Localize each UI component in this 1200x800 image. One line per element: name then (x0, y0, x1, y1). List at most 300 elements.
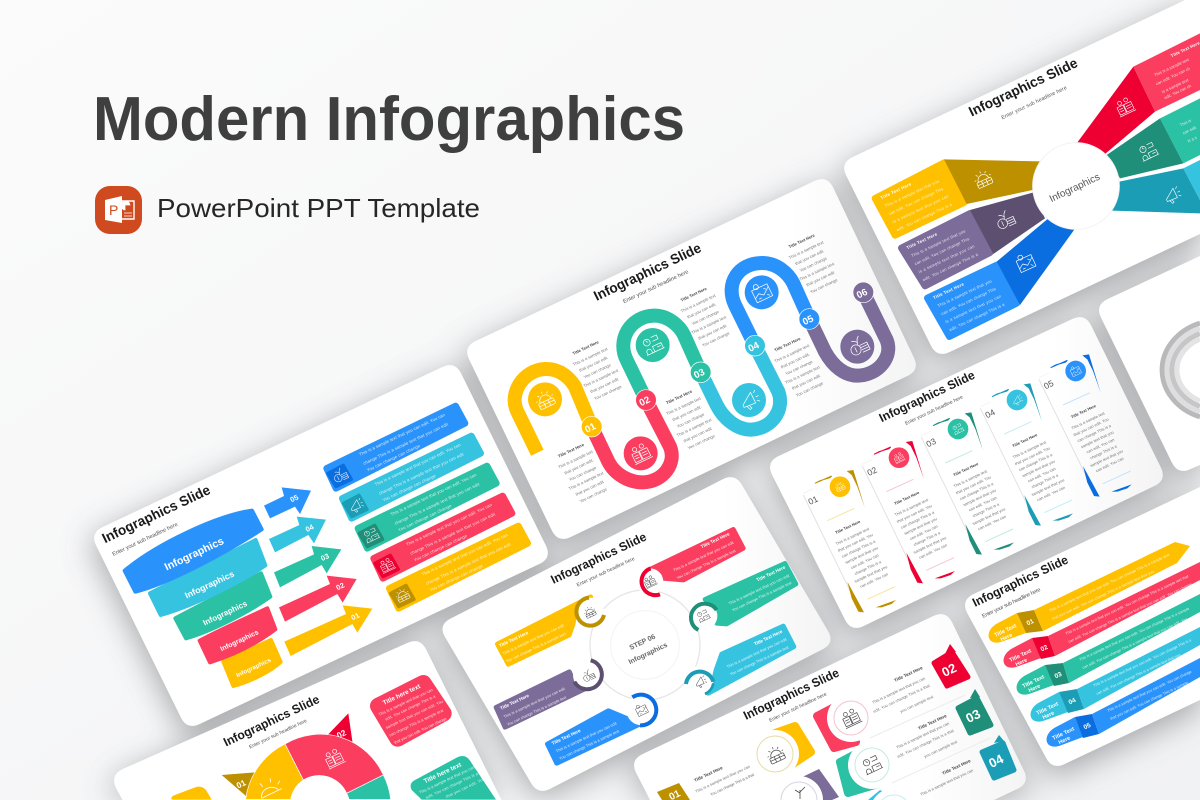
text block F: that you can edit. (794, 248, 825, 266)
step badge 05 (799, 309, 820, 329)
column 01: change This is a (853, 559, 883, 576)
column 01: can edit. You can (850, 553, 880, 570)
segment: red (1077, 33, 1200, 154)
column 02: can edit. You can (918, 542, 948, 560)
text block C: Title Text Here (665, 388, 694, 405)
center label: STEP 06 (629, 634, 657, 652)
segment: yellow (875, 159, 1041, 235)
node: yellow: Title Text Here (498, 630, 529, 648)
bar 03: Title Text (1022, 674, 1046, 690)
row 01 left: This is a sample text that you can (694, 764, 751, 794)
card: cyan: You can change can change (382, 473, 437, 503)
heading: funnel slide: Infographics Slide (99, 481, 213, 546)
column 03: 03 (924, 436, 938, 449)
subtitle: PowerPoint PPT Template (157, 193, 480, 223)
node: cyan: Title Text Here (753, 629, 784, 647)
bar 04: Here (1042, 710, 1055, 721)
bar 04: can edit. You can change This is a sample text that you (1096, 653, 1181, 696)
arrow 04: 04 (304, 522, 316, 534)
icon: red step (624, 436, 658, 470)
column 01: This is a sample text (835, 526, 871, 546)
text block B: You can change (579, 486, 608, 504)
subheading: donut slide: Enter your sub headline here (248, 718, 308, 750)
segment: blue: edit. You can change This is a (948, 302, 1006, 332)
column 02: can edit. You can (909, 524, 939, 541)
snake ribbon (515, 263, 888, 482)
subheading: funnel slide: Enter your sub headline here (112, 522, 179, 558)
text block F: You can change (809, 277, 839, 294)
card: blue (327, 406, 465, 488)
bar 04: 04 (1068, 697, 1078, 706)
text block A: Title Text Here (572, 339, 600, 356)
segment: yellow: edit. You can change This is a (896, 202, 953, 232)
node: teal: This is a sample text that you can edit (728, 573, 791, 606)
segment: yellow: Title Text Here (880, 181, 912, 200)
arrow 04 (269, 517, 326, 552)
card: cyan: This is a sample text that you can edit. You can (374, 442, 462, 487)
step badge 03: 03 (692, 367, 707, 381)
column 03: can edit. You can (968, 495, 998, 512)
node: yellow (497, 597, 604, 664)
column 02: change This is a (912, 530, 942, 547)
node: purple: This is a sample text that you can edit (503, 686, 567, 719)
card: teal text: This is a sample text that you can (418, 765, 475, 795)
segment: red: is a sample text (1161, 77, 1190, 94)
segment: teal: This is (1179, 118, 1192, 128)
node: blue: You can change This is a sample text (558, 728, 621, 761)
node: teal: Title Text Here (756, 565, 786, 583)
card: cyan (342, 436, 481, 518)
row 01 left: Title Text Here (693, 765, 724, 783)
subheading: bars slide: Enter your sub headline here (981, 587, 1042, 620)
node: cyan (685, 626, 794, 694)
step badge 01: 01 (583, 421, 598, 436)
bar 02: Here (1015, 657, 1028, 668)
column 02: This is a sample text (894, 497, 930, 517)
icon: blue step (745, 275, 779, 309)
arrow 05 (264, 487, 311, 518)
row 02: you can sample text (899, 694, 935, 714)
column 05: can change This is a (1076, 423, 1112, 443)
column 03: can change This is a (959, 481, 995, 501)
card: red (374, 496, 512, 578)
row 01 left (657, 726, 811, 800)
column 01: sample text that you (854, 564, 888, 584)
node: cyan: You can change This is a sample text (729, 644, 790, 677)
column 01: 01 (806, 494, 820, 507)
segment: blue: is a sample text that you can (944, 293, 1003, 324)
subheading: wheel slide: Enter your sub headline here (1001, 85, 1068, 121)
card: pink text: can change This is a sample text (388, 707, 445, 738)
subheading: rows slide: Enter your sub headline here (768, 691, 828, 724)
arrow 01: 01 (350, 611, 361, 622)
card: teal text: edit. You can change This is a (425, 771, 479, 800)
bar 05: that you can edit. You can change This is a sample (1110, 681, 1189, 721)
icon: cyan step (732, 383, 766, 417)
funnel: Infographics (183, 569, 236, 600)
subheading: timeline slide: Enter your sub headline here (622, 269, 690, 305)
slide card: numbered rows (634, 614, 1026, 800)
column 02 (862, 441, 955, 584)
node: cyan: This is a sample text that you can edit (726, 636, 788, 669)
card: pink text (378, 683, 448, 745)
main title: Modern Infographics (93, 85, 685, 154)
step badge 01 (581, 416, 602, 437)
heading: bars slide: Infographics Slide (970, 553, 1070, 610)
arrow 02 (279, 576, 357, 622)
text block B: Title Text Here (557, 442, 586, 459)
text block C: This is a sample text (676, 417, 713, 438)
icon: purple step (840, 330, 874, 364)
row 03 (840, 689, 991, 793)
bar 03: This is a sample text that you can edit. You can change This is a sample (1079, 607, 1190, 662)
slide card: donut (114, 641, 502, 800)
node: purple (496, 660, 602, 727)
bar 05 (1047, 658, 1200, 748)
bar 01: This is a sample text that you can edit. You can change This is a sample text (1049, 553, 1171, 613)
panel: concentric rings (1162, 323, 1200, 417)
step badge 03 (690, 362, 711, 383)
box: yellow stub (171, 787, 212, 800)
card: yellow: change This is a sample text that you can edit (425, 541, 512, 586)
column 03: that you can edit. You (955, 474, 992, 495)
slide card: wheel top right (844, 0, 1200, 354)
icon: yellow step (528, 382, 562, 416)
node: blue: Title Text Here (551, 728, 582, 746)
icon: PowerPoint logo (95, 186, 142, 234)
text block A: You can change (593, 384, 623, 401)
node: teal: You can change This is a sample text (731, 580, 793, 613)
text block A: that you can edit. (578, 355, 609, 373)
column 05: Title Text Here (1070, 403, 1097, 419)
arrow 02: 02 (335, 581, 346, 592)
card: yellow: This is a sample text that you can edit. You can (421, 532, 509, 577)
panel: five columns slide (803, 354, 1132, 613)
segment: purple: This is a sample text that you (910, 228, 967, 258)
funnel: Infographics (236, 657, 273, 679)
segment: teal: is a s (1187, 135, 1198, 144)
card: red: change This is a sample text that you can edit (409, 511, 497, 556)
row 03: This is a sample text that you can (895, 721, 950, 750)
column 05 (1039, 354, 1132, 497)
bar 04: Title Text (1036, 701, 1060, 717)
text block C: that you can edit (683, 426, 713, 443)
column 01: that you can edit. You (837, 532, 874, 553)
subheading: cycle slide: Enter your sub headline here (576, 556, 636, 588)
bar 04 (1031, 627, 1200, 723)
node: yellow: You can change This is a sample text (505, 631, 567, 664)
node: red: You can change This is a sample text (676, 548, 737, 580)
segment: blue (927, 218, 1075, 337)
segment: blue: Title Text Here (932, 281, 965, 300)
step badge 06: 06 (855, 287, 870, 301)
bar 02: can edit. You can change This is a sample text that you can edit. You can change (1068, 582, 1193, 644)
funnel (125, 511, 281, 686)
bar 01: Title Text (994, 623, 1018, 639)
arrow 01 (284, 605, 372, 656)
card: teal (358, 466, 496, 548)
row 04: 04 (986, 751, 1007, 771)
panel: numbered rows slide (657, 644, 1014, 800)
pointer 02: 02 (335, 727, 348, 740)
bar 01: 01 (1026, 618, 1036, 627)
node: blue: This is a sample text that you can edit (555, 720, 618, 754)
text block F: that you can edit (805, 270, 836, 287)
funnel: Infographics (219, 629, 260, 653)
bar 02: 02 (1040, 644, 1050, 653)
column 04: sample text that you (1031, 477, 1065, 497)
bar 05: 05 (1083, 722, 1093, 731)
panel: horizontal bars slide (970, 542, 1200, 748)
segment: blue: can edit. You can change This (940, 286, 997, 316)
row 02: Title Text Here (893, 665, 924, 683)
text block D: Title Text Here (680, 286, 708, 303)
segment: red: can edit. You can ch (1155, 66, 1191, 86)
text block D: This is a sample text (680, 293, 717, 314)
column 03: sample text that you (962, 488, 997, 507)
bar 01 (989, 542, 1190, 645)
node: red: This is a sample text that you can edit (672, 539, 735, 573)
column 04: 04 (983, 407, 997, 420)
heading: rows slide: Infographics Slide (741, 666, 841, 723)
column 05: can edit. You can (1085, 437, 1115, 454)
card: red: You can change can change (413, 533, 468, 563)
column 01: can change This is a (841, 538, 877, 559)
column 03: can edit. You can (977, 514, 1007, 531)
bar 01: that you can edit. You can change This is a sample text that you (1052, 569, 1155, 621)
row 04: This is a sample text that you can (919, 768, 974, 797)
segment: cyan (1112, 160, 1200, 213)
text block C: This is a sample text (665, 395, 702, 416)
segment: yellow: can edit. You can change This (888, 186, 944, 216)
column 04: can change This is a (1018, 452, 1054, 472)
segment: yellow: This is a sample text that you (884, 178, 940, 208)
step badge 02 (636, 390, 656, 410)
heading: wheel slide: Infographics Slide (966, 54, 1080, 119)
node: yellow: This is a sample text that you can edit (502, 622, 566, 656)
pointer 02 (327, 713, 353, 743)
bar 05: This is a sample text that you can edit. You can change (1107, 670, 1192, 713)
column 04: can edit. You can (1027, 466, 1057, 483)
icon: PowerPoint logo: P (109, 202, 118, 218)
card: teal: This is a sample text that you can edit. You can (390, 472, 478, 517)
heading: columns slide: Infographics Slide (877, 368, 977, 425)
card: blue: This is a sample text that you can edit. You can (358, 412, 446, 457)
text block C: that you can edit. (672, 404, 702, 422)
column 02: sample text that you (903, 516, 938, 536)
card: red: This is a sample text that you can edit. You can (405, 502, 493, 547)
segment: red: Title Text Here (1170, 40, 1200, 58)
subheading: columns slide: Enter your sub headline here (904, 394, 964, 427)
pointer 01 (222, 772, 255, 797)
text block F: This is a sample text (798, 261, 836, 282)
segment: red: edit. You can ch (1163, 83, 1193, 100)
bar 05: Title Text (1052, 726, 1076, 742)
node: teal (689, 563, 796, 630)
column 03: This is a sample text (953, 468, 989, 489)
card: pink text: that you can edit. You can change (393, 716, 448, 745)
text block E: You can change (784, 359, 814, 376)
card: cyan: change This is a sample text that you can edit (378, 451, 465, 496)
row 03: 03 (963, 706, 983, 726)
text block F: You can change (799, 255, 828, 273)
donut chart (246, 734, 391, 799)
slide card: five columns (770, 317, 1163, 628)
text block E: that you can edit (791, 373, 822, 391)
row 02: This is a sample text that you can (871, 676, 926, 705)
segment: yellow: is a sample text that you can (892, 193, 950, 224)
step badge 04: 04 (747, 340, 762, 355)
text block A: that you can edit (589, 376, 620, 394)
text block B: that you can edit (575, 479, 605, 497)
text block D: You can change (691, 309, 720, 326)
card: teal: You can change can change (397, 503, 453, 533)
column 04: change This is a (1030, 472, 1060, 489)
bar 03: can edit. You can change This is a sample text that you can edit. You (1082, 617, 1188, 670)
column 02: sample text that you (913, 535, 947, 555)
panel: step cycle slide (496, 529, 796, 763)
card: teal text: that you can edit. You (445, 776, 485, 799)
column 05: can edit. You can (1095, 456, 1124, 473)
node: blue (547, 695, 657, 763)
center circle: Infographics (1048, 172, 1102, 205)
panel: snake timeline slide (515, 230, 888, 505)
icon: teal step (636, 328, 670, 362)
column 02: can change This is a (900, 509, 936, 530)
arrow 03 (274, 546, 341, 587)
center rings (590, 590, 700, 700)
row 02: edit. You can change This is a that (872, 683, 931, 714)
card: teal text: Title here text (423, 761, 463, 785)
text block A: This is a sample text (572, 346, 609, 367)
center circle (1033, 143, 1119, 229)
center label: Infographics (628, 642, 669, 666)
column 01: can edit. You can (859, 571, 889, 589)
arrow 05: 05 (289, 493, 300, 504)
node: purple: You can change This is a sample text (506, 694, 568, 727)
step badge 04 (745, 335, 765, 356)
card: pink text: Title here text (382, 683, 422, 707)
column 01: Title Text Here (834, 519, 862, 535)
slide card: step cycle (442, 477, 831, 791)
bar 02: Title Text (1009, 648, 1033, 664)
card: teal text (411, 756, 496, 800)
text block B: This is a sample text (557, 449, 594, 470)
segment: purple (901, 193, 1045, 286)
segment: purple: edit. You can change This is a (922, 252, 979, 282)
text block E: This is a sample text (784, 364, 821, 385)
row 03: you can sample text (923, 739, 959, 759)
text block C: You can change (676, 411, 706, 429)
node: red: Title Text Here (700, 531, 731, 549)
arrow 03: 03 (319, 551, 331, 563)
bar 02: This is a sample text that you can edit. You can change This is a sample text that (1065, 574, 1190, 636)
text block E: This is a sample text (774, 343, 811, 364)
column 03: change This is a (971, 501, 1001, 518)
column 05: change This is a (1089, 443, 1118, 460)
card: pink text: edit. You can change This is a (384, 693, 437, 722)
segment: purple: is a sample text that you can (918, 243, 976, 274)
funnel: Infographics (163, 535, 226, 573)
bar 03: 03 (1054, 671, 1064, 680)
panel: funnel slide (99, 406, 528, 686)
text block D: that you can edit (697, 323, 728, 341)
column 04 (980, 383, 1073, 526)
column 02: that you can edit. You (896, 503, 933, 524)
column 04: can edit. You can (1036, 485, 1066, 502)
segment: blue: This is a sample text that you (937, 278, 993, 308)
text block F: This is a sample text (788, 239, 825, 260)
column 05: sample text that you (1080, 430, 1114, 449)
bar 04: This is a sample text that you can edit. You can change This is a (1093, 638, 1193, 688)
heading: cycle slide: Infographics Slide (548, 530, 649, 587)
slide card: horizontal bars (965, 487, 1200, 766)
text block C: You can change (687, 433, 716, 450)
column 04: sample text that you (1021, 459, 1056, 478)
step badge 02: 02 (638, 395, 652, 409)
segment: teal (1107, 98, 1200, 178)
text block D: This is a sample text (690, 314, 728, 335)
text block B: that you can edit. (564, 457, 594, 475)
heading: timeline slide: Infographics Slide (591, 239, 704, 304)
row 02 (817, 644, 968, 748)
row 05 left (775, 769, 839, 800)
text block F: Title Text Here (788, 232, 816, 249)
column 05: 05 (1042, 378, 1055, 391)
step badge 05: 05 (801, 313, 816, 328)
column 04: Title Text Here (1011, 432, 1039, 448)
text block D: that you can edit. (686, 301, 717, 319)
column 04: This is a sample text (1012, 439, 1048, 460)
row 04: Title Text Here (941, 758, 972, 776)
slide card: funnel (94, 365, 548, 726)
column 04: that you can edit. You (1014, 445, 1051, 466)
text block A: You can change (583, 362, 612, 380)
card: pink text: sample text that you can edit. You (385, 699, 444, 730)
text block E: Title Text Here (773, 336, 802, 353)
segment: red: This is a sample text (1153, 57, 1190, 78)
row 02: 02 (939, 660, 959, 680)
bar 01: Here (1000, 632, 1013, 643)
column 02: Title Text Here (893, 490, 921, 506)
column 02: 02 (865, 465, 879, 478)
step badge 06 (853, 282, 874, 303)
bar 02 (1004, 562, 1200, 670)
text block B: This is a sample text (568, 470, 605, 491)
card: yellow (389, 526, 528, 608)
card: yellow: You can change can change (429, 563, 484, 593)
bar 03 (1017, 594, 1200, 696)
row 04 (868, 735, 1014, 800)
card: blue: You can change can change (366, 443, 421, 473)
text block E: You can change (795, 380, 825, 398)
pointer 01: 01 (235, 777, 248, 790)
row 03: Title Text Here (917, 713, 948, 731)
row 01 left: You can change This is a that (709, 772, 756, 797)
panel: wheel slide (875, 33, 1200, 337)
heading: donut slide: Infographics Slide (221, 692, 322, 749)
card: pink text: This is a sample text that you can (378, 687, 433, 717)
text block A: This is a sample text (582, 367, 620, 388)
text block D: You can change (701, 330, 731, 348)
row 03: edit. You can change This is a that (896, 728, 955, 759)
panel: donut slide (171, 683, 496, 800)
column 05: that you can edit. You (1073, 416, 1109, 437)
slide card: concentric rings (1099, 256, 1200, 471)
funnel: Infographics (202, 599, 249, 627)
card: teal: change This is a sample text that you can edit (394, 481, 481, 526)
column 03: sample text that you (972, 506, 1006, 526)
